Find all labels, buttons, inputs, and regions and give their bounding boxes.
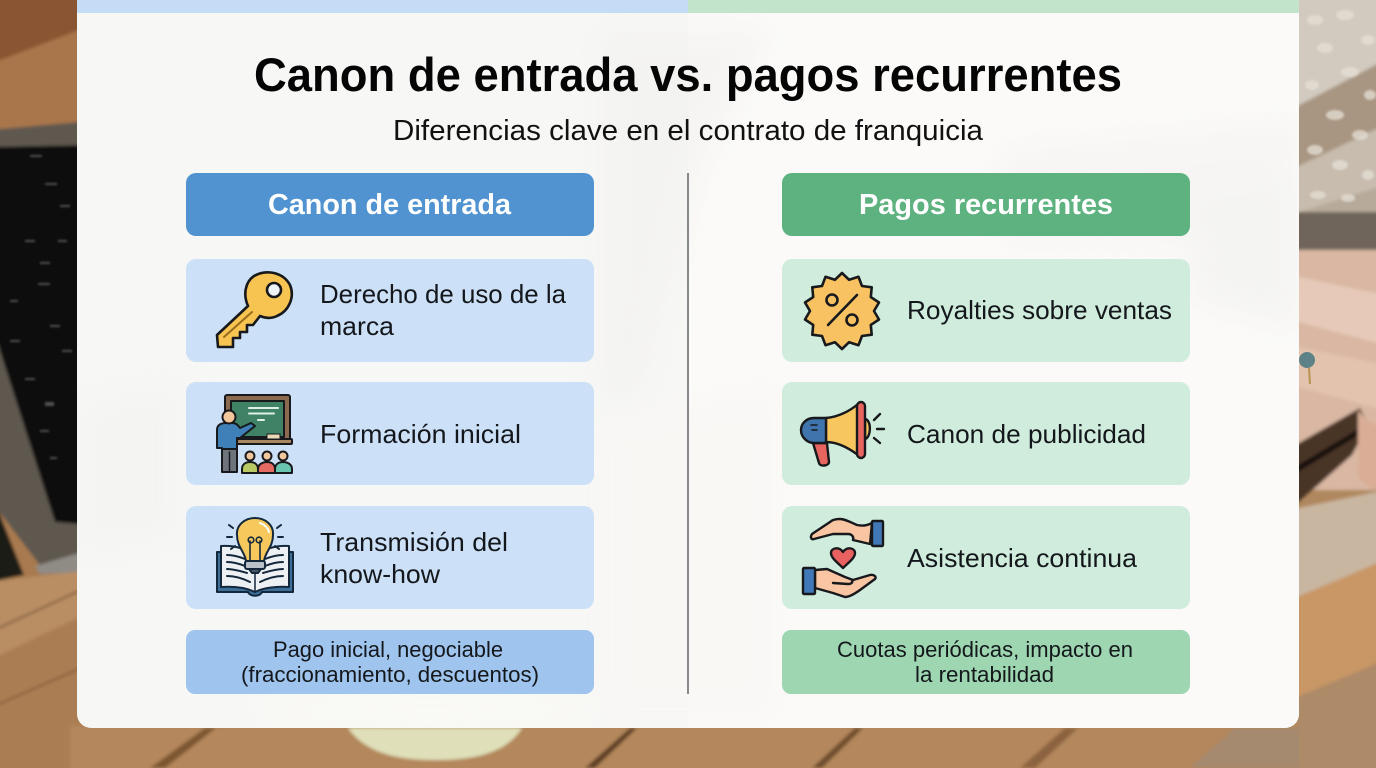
card: derecho de uso de la marca: Derecho de uso de la [320, 279, 567, 309]
card: derecho de uso de la marca: marca [320, 311, 395, 341]
column: Pagos recurrentes [782, 173, 1190, 694]
top band: green [688, 0, 1299, 13]
subtitle: Diferencias clave en el contrato de franquicia [393, 115, 984, 147]
title: Canon de entrada vs. pagos recurrentes [254, 48, 1122, 101]
note: pago inicial: Pago inicial, negociable [273, 637, 503, 662]
icon: key [217, 272, 292, 347]
card: transmision del know-how: know-how [320, 559, 440, 589]
card: royalties sobre ventas: Royalties sobre ventas [907, 295, 1172, 325]
card: formacion inicial [186, 382, 594, 485]
center divider [687, 173, 689, 694]
header: Pagos recurrentes: Pagos recurrentes [859, 189, 1113, 221]
top band: blue [77, 0, 688, 13]
column: Canon de entrada [186, 173, 594, 694]
header: Pagos recurrentes [782, 173, 1190, 236]
icon: megaphone [801, 402, 884, 466]
note: cuotas periodicas: la rentabilidad [915, 662, 1054, 687]
note: pago inicial: (fraccionamiento, descuentos) [241, 662, 539, 687]
card: canon de publicidad: Canon de publicidad [907, 419, 1146, 449]
note: cuotas periodicas: Cuotas periódicas, impacto en [837, 637, 1133, 662]
icon: teacher at chalkboard [217, 395, 292, 473]
header: Canon de entrada [186, 173, 594, 236]
note: pago inicial [186, 630, 594, 694]
ring on finger [1299, 352, 1315, 384]
card: transmision del know-how [186, 506, 594, 609]
icon: hands holding heart [803, 519, 883, 597]
note: cuotas periodicas [782, 630, 1190, 694]
card: royalties sobre ventas [782, 259, 1190, 362]
card: asistencia continua: Asistencia continua [907, 543, 1138, 573]
card: derecho de uso de la marca [186, 259, 594, 362]
card: transmision del know-how: Transmisión del [320, 527, 508, 557]
icon: percent badge [805, 273, 879, 349]
header: Canon de entrada: Canon de entrada [268, 189, 512, 221]
card: formacion inicial: Formación inicial [320, 419, 521, 449]
icon: open book with light bulb [217, 518, 293, 596]
card: canon de publicidad [782, 382, 1190, 485]
card: asistencia continua [782, 506, 1190, 609]
